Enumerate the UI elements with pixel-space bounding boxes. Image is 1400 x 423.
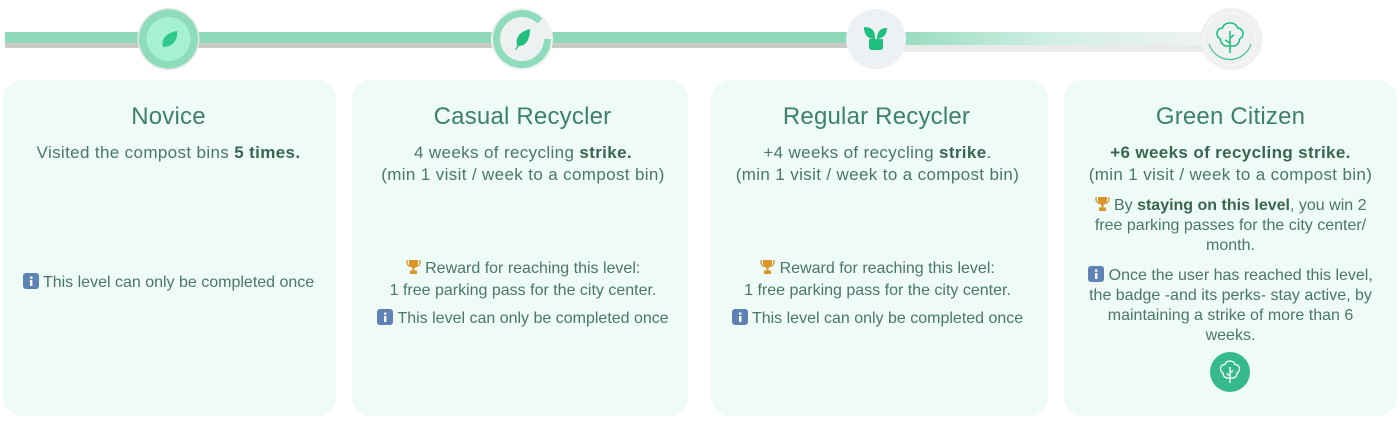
note: novice info: This level can only be completed once — [43, 274, 314, 291]
text: casual reward: Reward for reaching this level: — [425, 260, 640, 277]
note: casual info: This level can only be completed once — [397, 310, 669, 327]
heading: green citizen: Green Citizen — [1156, 103, 1305, 130]
text: casual reward detail: 1 free parking pass for the city center. — [390, 282, 656, 299]
note: regular info: This level can only be completed once — [752, 310, 1023, 327]
progress bar — [5, 32, 1205, 52]
progress timeline — [5, 8, 1262, 70]
note: green info line 2: the badge -and its perks- stay active, by — [1089, 287, 1372, 304]
text: regular reward detail: 1 free parking pass for the city center. — [744, 282, 1011, 299]
badge: casual recycler leaf — [491, 8, 553, 70]
text: regular minimum: (min 1 visit / week to a compost bin) — [736, 165, 1019, 184]
heading: regular recycler: Regular Recycler — [783, 103, 970, 130]
note: green info line 1: Once the user has reached this level, — [1109, 267, 1373, 284]
heading: casual recycler: Casual Recycler — [434, 103, 611, 130]
badge: novice leaf — [138, 8, 200, 70]
text: novice requirement: Visited the compost bins 5 times. — [37, 143, 300, 162]
text: green minimum: (min 1 visit / week to a compost bin) — [1089, 165, 1372, 184]
text: green reward line 2: free parking passes for the city center/ — [1095, 217, 1366, 234]
text: green requirement: +6 weeks of recycling strike. — [1110, 143, 1351, 162]
badge: green citizen tree — [1200, 8, 1262, 70]
panel: green citizen — [1064, 80, 1397, 416]
note: green info line 3: maintaining a strike of more than 6 — [1108, 307, 1353, 324]
text: regular requirement: +4 weeks of recycling strike. — [763, 143, 992, 162]
note: green info line 4: weeks. — [1206, 327, 1255, 344]
panel: casual recycler — [352, 80, 688, 416]
text: casual requirement: 4 weeks of recycling strike. — [414, 143, 632, 162]
panel: regular recycler — [711, 80, 1048, 416]
heading: novice: Novice — [131, 103, 206, 130]
icon: tree badge — [1210, 352, 1250, 392]
badge: regular recycler plant — [846, 9, 906, 69]
text: green reward: By staying on this level, you win 2 — [1114, 197, 1366, 214]
text: casual minimum: (min 1 visit / week to a compost bin) — [381, 165, 665, 184]
text: regular reward: Reward for reaching this level: — [780, 260, 995, 277]
panel: novice — [3, 80, 336, 416]
text: green reward line 3: month. — [1206, 237, 1255, 254]
